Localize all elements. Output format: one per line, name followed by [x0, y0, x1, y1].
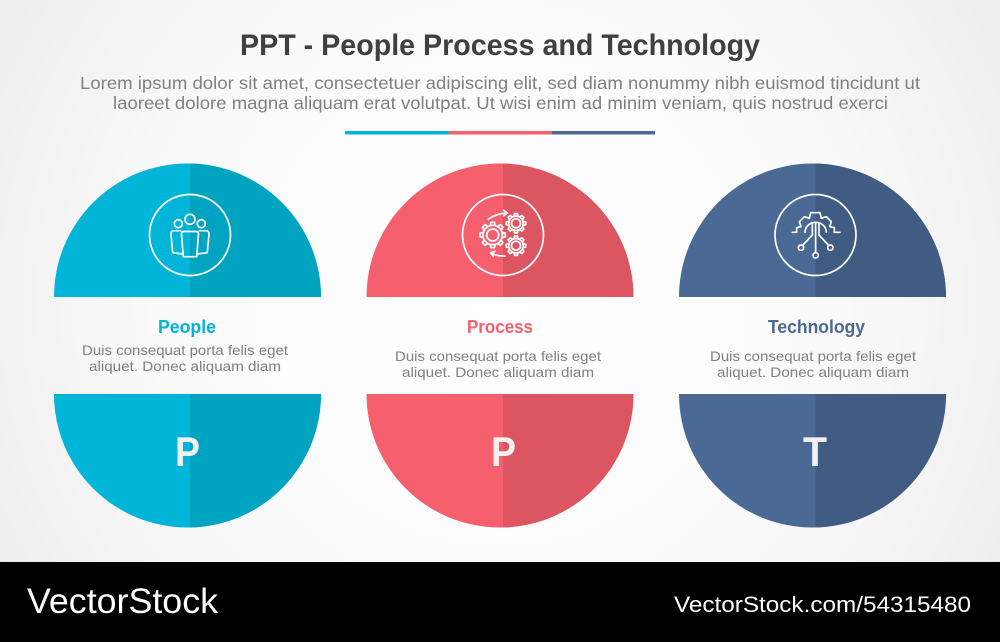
technology label: Technology: [768, 317, 865, 337]
subtitle text: Lorem ipsum dolor sit amet, consectetuer adipiscing elit, sed diam nonummy nibh euismod tincidunt ut: [80, 73, 920, 93]
panel: people: [54, 164, 321, 528]
subtitle text: [80, 73, 920, 113]
panel: technology: [679, 164, 946, 528]
panel: process: [366, 164, 634, 528]
icon: people group: [150, 194, 230, 276]
top half circle: process: [366, 164, 634, 297]
footer logo: VectorStock: [27, 582, 219, 621]
people description: Duis consequat porta felis eget: [82, 342, 288, 358]
bottom half circle: technology: [679, 394, 946, 528]
top half circle: people: [54, 164, 321, 297]
technology description: aliquet. Donec aliquam diam: [717, 364, 909, 380]
process description: aliquet. Donec aliquam diam: [402, 364, 594, 380]
technology description: [710, 348, 916, 380]
people description: aliquet. Donec aliquam diam: [89, 358, 281, 374]
technology description: Duis consequat porta felis eget: [710, 348, 916, 364]
bottom half circle: process: [366, 394, 634, 528]
icon: gears and arrows: [462, 194, 544, 276]
process description: Duis consequat porta felis eget: [395, 348, 601, 364]
process description: [395, 348, 601, 380]
process label: Process: [467, 317, 533, 337]
letter P: P: [491, 428, 516, 475]
subtitle text: laoreet dolore magna aliquam erat volutpat. Ut wisi enim ad minim veniam, quis nostrud exerci: [113, 93, 888, 113]
title: PPT - People Process and Technology: [240, 29, 760, 62]
top half circle: technology: [679, 164, 946, 297]
letter T: T: [803, 428, 827, 475]
tri-colour divider: [345, 131, 655, 134]
bottom half circle: people: [54, 394, 321, 528]
footer bar: [0, 562, 1000, 642]
people label: People: [158, 317, 216, 337]
icon: technology gear circuit: [775, 194, 856, 276]
people description: [82, 342, 288, 374]
letter P: P: [175, 428, 200, 475]
footer image id: VectorStock.com/54315480: [674, 592, 971, 617]
